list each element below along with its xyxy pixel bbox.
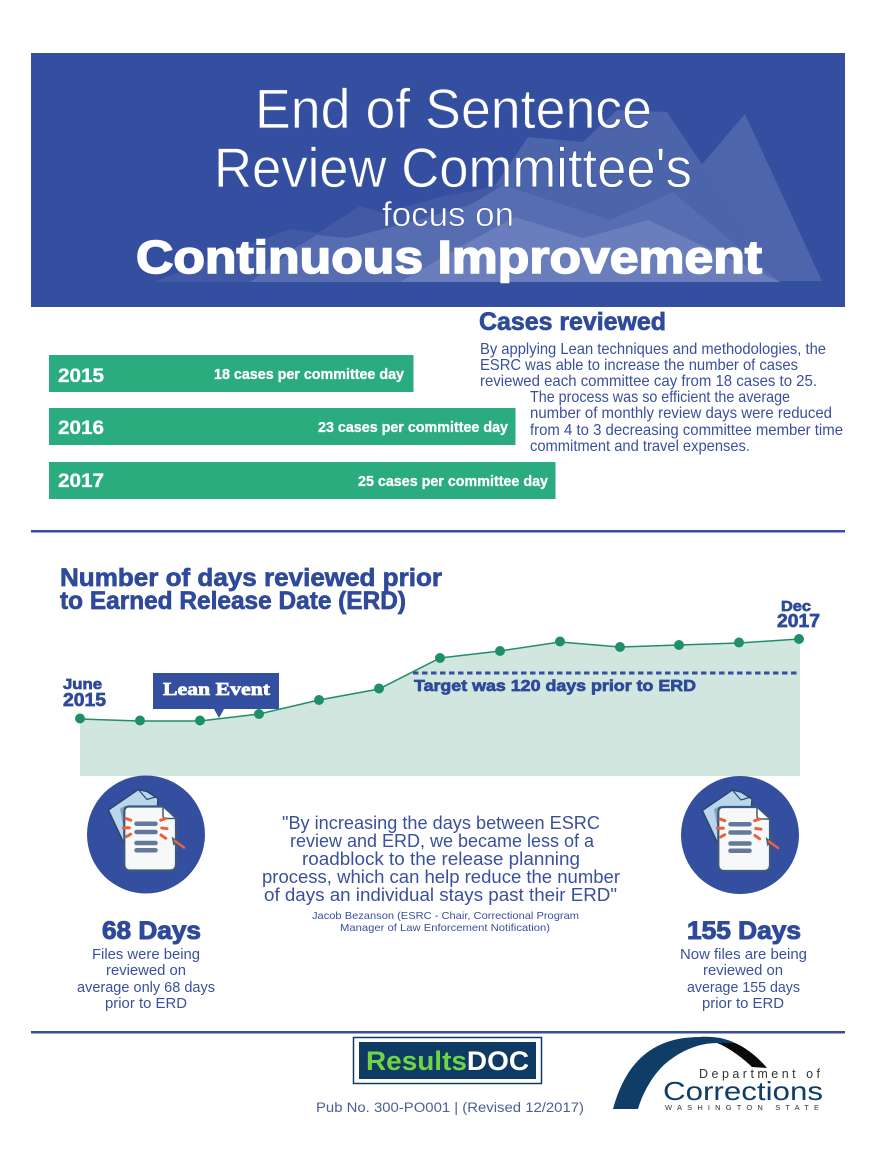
stat: 68 days: Files were being (92, 947, 200, 963)
start label (63, 676, 106, 710)
target label: Target was 120 days prior to ERD (414, 678, 696, 695)
bar 2015: 2015 (58, 366, 104, 387)
bar 2016 (49, 408, 516, 445)
stat: 68 days: prior to ERD (105, 996, 187, 1012)
text block: lean techniques (480, 341, 826, 390)
quote attribution: Manager of Law Enforcement Notification) (340, 922, 550, 934)
text block: process efficiency: number of monthly review days were reduced (530, 405, 832, 422)
logo: ResultsDOC (354, 1038, 542, 1084)
stat: 155 days: Now files are being (680, 947, 807, 963)
end label (777, 598, 820, 631)
start label: June (63, 676, 102, 693)
title line 4: Continuous Improvement (136, 231, 762, 283)
heading: number of days reviewed: Number of days reviewed prior (60, 564, 442, 592)
chart: days prior to ERD area chart (63, 598, 820, 776)
heading: cases reviewed: Cases reviewed (479, 308, 666, 336)
icon: files left (87, 776, 205, 894)
text block: process efficiency: from 4 to 3 decreasing committee member time (530, 422, 843, 439)
bar 2016: 2016 (58, 418, 104, 439)
quote: of days an individual stays past their ERD" (264, 884, 617, 905)
stat: 68 days: 68 Days (102, 917, 201, 945)
logo: Department of Corrections: WASHINGTON STATE (665, 1103, 819, 1112)
title line 2: Review Committee's (214, 136, 692, 199)
title line 1: End of Sentence (255, 77, 652, 140)
stat: 155 days: 155 Days (687, 917, 801, 945)
quote: roadblock to the release planning (302, 848, 580, 869)
mountains illustration (153, 110, 822, 282)
callout: lean event (153, 673, 279, 718)
target line (413, 672, 800, 674)
stat: 68 days (77, 917, 215, 1012)
text block: process efficiency: The process was so efficient the average (530, 389, 790, 406)
stat: 155 days (680, 917, 807, 1012)
text block: lean techniques: ESRC was able to increase the number of cases (480, 357, 798, 374)
quote attribution (312, 910, 579, 934)
bar 2016: 23 cases per committee day (318, 420, 508, 436)
bar 2017: 2017 (58, 471, 104, 492)
panel: title banner (31, 53, 845, 307)
quote (262, 812, 620, 905)
bar 2017 (49, 462, 556, 499)
logo: Department of Corrections: Corrections (663, 1076, 823, 1106)
heading: number of days reviewed (60, 564, 442, 615)
quote attribution: Jacob Bezanson (ESRC - Chair, Correctional Program (312, 910, 579, 922)
panel: cases reviewed bars (49, 355, 556, 499)
heading: number of days reviewed: to Earned Release Date (ERD) (60, 587, 406, 615)
end label: Dec (781, 598, 811, 615)
bar 2017: 25 cases per committee day (358, 474, 548, 490)
stat: 68 days: average only 68 days (77, 980, 215, 996)
quote: "By increasing the days between ESRC (282, 812, 600, 833)
stat: 155 days: reviewed on (703, 963, 783, 979)
quote: review and ERD, we became less of a (290, 830, 595, 851)
icon: files right (681, 776, 799, 894)
logo: Department of Corrections (613, 1037, 823, 1112)
quote: process, which can help reduce the number (262, 866, 620, 887)
logo: Department of Corrections: Department of (699, 1067, 821, 1081)
bar 2015 (49, 355, 414, 392)
text block: process efficiency: commitment and travel expenses. (530, 438, 750, 455)
stat: 155 days: average 155 days (687, 980, 800, 996)
stat: 68 days: reviewed on (106, 963, 186, 979)
stat: 155 days: prior to ERD (702, 996, 784, 1012)
callout: lean event: Lean Event (163, 679, 270, 699)
bar 2015: 18 cases per committee day (214, 367, 404, 383)
end label: 2017 (777, 611, 820, 631)
text block: lean techniques: By applying Lean techniques and methodologies, the (480, 341, 826, 358)
start label: 2015 (63, 690, 106, 710)
logo: ResultsDOC: ResultsDOC (366, 1046, 529, 1076)
publication number: Pub No. 300-PO001 | (Revised 12/2017) (316, 1099, 584, 1115)
text block: process efficiency (530, 389, 843, 455)
text block: lean techniques: reviewed each committee cay from 18 cases to 25. (480, 373, 817, 390)
title line 3: focus on (382, 196, 514, 234)
